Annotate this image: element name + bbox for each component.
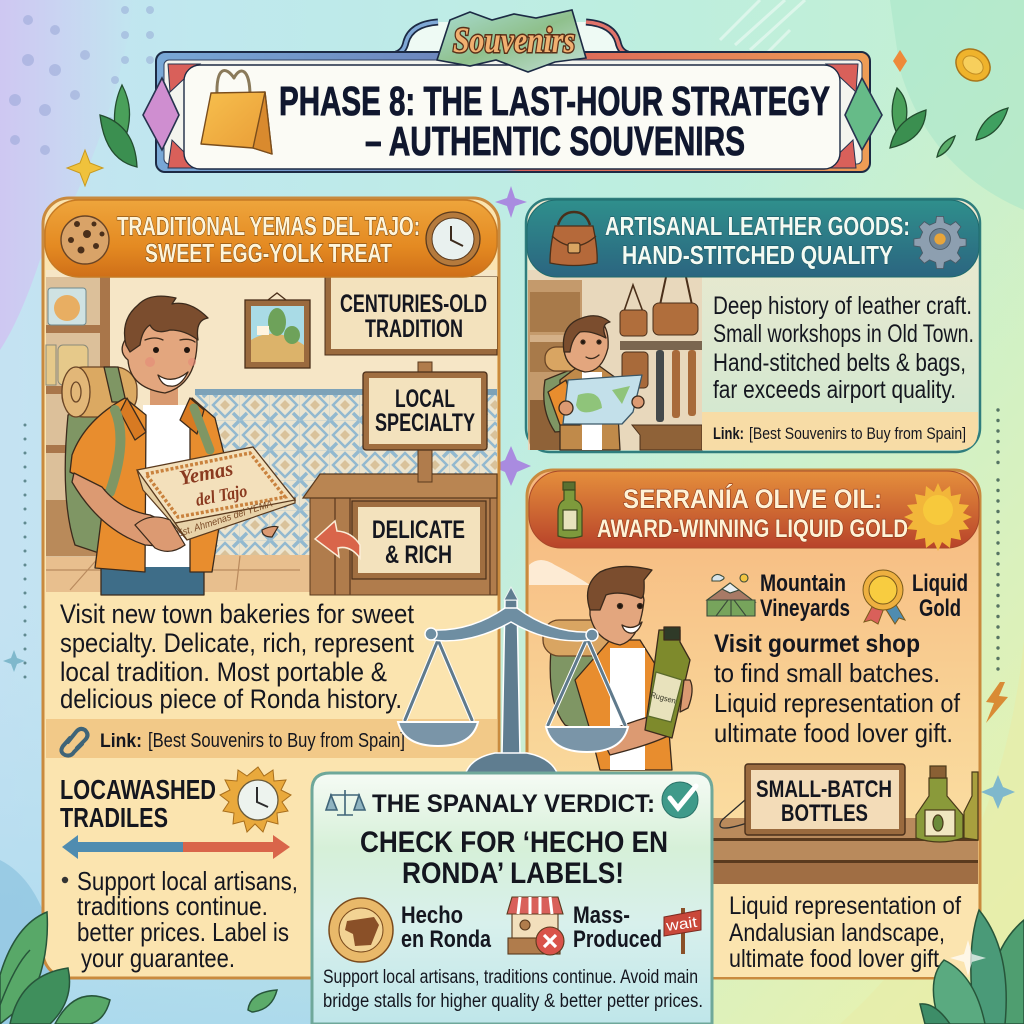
icon: clock	[426, 212, 480, 266]
picture frame	[245, 293, 310, 368]
banner	[143, 10, 882, 172]
text block: verdict advice	[323, 967, 703, 1012]
icon: hecho en ronda seal	[329, 898, 393, 962]
icon: wait sign: wait	[664, 914, 699, 935]
text block: bakery description: delicious piece of Ronda history.	[60, 684, 402, 714]
label: mass-produced: Mass-	[573, 902, 630, 929]
text block: gourmet shop	[714, 630, 961, 748]
sign: local specialty	[363, 362, 487, 482]
verdict headline: CHECK FOR ‘HECHO EN	[360, 826, 668, 859]
icon: gold coin	[950, 42, 996, 88]
icon: check mark	[662, 782, 698, 818]
sign: delicate and rich: DELICATE	[372, 516, 465, 544]
heading: locawashed tradiles: LOCAWASHED	[60, 774, 216, 805]
heading: locawashed tradiles	[60, 774, 216, 833]
panel: olive oil	[527, 470, 980, 978]
link bar: yemas: [Best Souvenirs to Buy from Spain]	[148, 730, 405, 752]
text block: andalusian landscape: Andalusian landscape,	[729, 919, 945, 947]
text block: gourmet shop: to find small batches.	[714, 658, 940, 688]
arrow: two-way comparison	[62, 835, 290, 859]
yemas del tajo box: Est. Ahmenas del YEMA	[176, 498, 274, 540]
text block: leather description: far exceeds airport quality.	[713, 376, 956, 404]
souvenirs map badge	[437, 10, 586, 72]
sign: centuries-old tradition	[325, 277, 497, 355]
label: mass-produced	[573, 902, 662, 953]
text block: andalusian landscape: ultimate food lover gift.	[729, 945, 945, 973]
link bar: yemas	[46, 719, 497, 758]
shelves	[46, 277, 110, 557]
label: mountain vineyards	[760, 570, 850, 622]
label: mountain vineyards: Vineyards	[760, 595, 850, 622]
title: PHASE 8: THE LAST-HOUR STRATEGY	[279, 78, 830, 124]
bullet list: local artisans: your guarantee.	[81, 943, 235, 973]
small-batch sign: SMALL-BATCH	[756, 776, 892, 803]
text block: leather description: Hand-stitched belts & bags,	[713, 349, 966, 377]
label: mass-produced: Produced	[573, 926, 662, 953]
illustration: bakery scene	[46, 270, 497, 595]
character: traveller with olive oil: Rugsen	[649, 690, 677, 706]
sign: centuries-old tradition: CENTURIES-OLD	[340, 290, 487, 318]
icon: market stall	[507, 897, 564, 955]
yemas del tajo box: del Tajo	[194, 480, 249, 510]
label: mountain vineyards: Mountain	[760, 570, 846, 597]
icon: white sparkle	[950, 940, 986, 976]
icon: mountain vineyards	[707, 574, 755, 616]
small-batch sign: BOTTLES	[781, 800, 868, 827]
icon: gear	[914, 216, 966, 269]
sign: delicate and rich	[352, 501, 486, 579]
text block: verdict advice: Support local artisans, traditions continue. Avoid main	[323, 967, 698, 988]
text block: bakery description: specialty. Delicate, rich, represent	[60, 628, 414, 658]
text block: andalusian landscape: Liquid representation of	[729, 892, 961, 920]
header: leather goods	[527, 200, 979, 277]
icon: sparkles and small decorations	[3, 50, 1015, 809]
title	[279, 78, 830, 164]
icon: shopping bag	[201, 71, 272, 154]
label: hecho en ronda: en Ronda	[401, 926, 492, 953]
small-batch sign	[720, 764, 905, 835]
illustration: leather workshop	[528, 270, 702, 450]
icon: balance scale	[398, 587, 628, 775]
header: olive oil: SERRANÍA OLIVE OIL:	[623, 483, 882, 514]
icon: olive oil bottle	[558, 482, 582, 538]
icon: medal	[863, 570, 905, 624]
text block: leather description	[713, 292, 974, 404]
bullet list: local artisans: better prices. Label is	[77, 917, 289, 947]
icon: small bottles	[916, 766, 978, 842]
panel: spanaly verdict	[312, 773, 712, 1024]
header: yemas: SWEET EGG-YOLK TREAT	[145, 238, 392, 268]
text block: gourmet shop: ultimate food lover gift.	[714, 718, 953, 748]
icon: leaves left of banner	[100, 85, 137, 167]
shelf with bottles	[529, 764, 978, 977]
label: liquid gold: Liquid	[912, 570, 968, 597]
icon: sun	[904, 483, 972, 551]
link bar: yemas: Link:	[100, 731, 142, 752]
icon: leather bag	[550, 212, 597, 266]
label: hecho en ronda	[401, 902, 492, 953]
text block: bakery description: local tradition. Most portable &	[60, 657, 387, 687]
text block: gourmet shop: Liquid representation of	[714, 688, 961, 718]
label: liquid gold: Gold	[919, 595, 961, 622]
text block: gourmet shop: Visit gourmet shop	[714, 630, 920, 658]
link bar: leather: [Best Souvenirs to Buy from Spain]	[749, 424, 966, 443]
header: leather goods: ARTISANAL LEATHER GOODS:	[605, 211, 910, 241]
sign: local specialty: SPECIALTY	[375, 409, 475, 437]
link bar: leather	[702, 412, 978, 450]
header: yemas: TRADITIONAL YEMAS DEL TAJO:	[117, 211, 420, 241]
sign: delicate and rich: & RICH	[385, 541, 452, 569]
header: olive oil	[529, 471, 979, 551]
header: yemas	[45, 200, 497, 277]
verdict headline: RONDA’ LABELS!	[402, 857, 624, 890]
text block: bakery description: Visit new town bakeries for sweet	[60, 599, 414, 629]
character: traveller with box	[62, 296, 228, 595]
header: olive oil: AWARD-WINNING LIQUID GOLD	[597, 515, 908, 543]
icon: verdict scales	[326, 790, 365, 815]
counter	[303, 474, 497, 595]
verdict headline	[360, 826, 668, 890]
icon: sun clock	[220, 767, 291, 832]
label: hecho en ronda: Hecho	[401, 902, 463, 929]
character: traveller with map	[544, 316, 644, 450]
plant: bottom right	[920, 910, 1024, 1024]
icon: cookie	[61, 216, 109, 264]
title: – AUTHENTIC SOUVENIRS	[365, 118, 745, 164]
heading: locawashed tradiles: TRADILES	[60, 802, 168, 833]
panel: leather goods	[526, 199, 980, 452]
icon: chain link	[61, 729, 88, 756]
text block: bakery description	[60, 599, 414, 714]
text block: verdict advice: bridge stalls for higher quality & better petter prices.	[323, 991, 703, 1012]
bullet list: local artisans: traditions continue.	[77, 891, 268, 921]
link bar: leather: Link:	[713, 424, 744, 443]
header: leather goods: HAND-STITCHED QUALITY	[622, 240, 893, 270]
icon: leaves right of banner	[890, 88, 1008, 157]
yemas del tajo box: Yemas	[177, 456, 235, 490]
souvenirs map badge: Souvenirs	[453, 20, 575, 60]
text block: leather description: Deep history of leather craft.	[713, 292, 972, 320]
sign: local specialty: LOCAL	[395, 385, 455, 413]
character: traveller with olive oil	[543, 566, 692, 770]
banner frame	[143, 22, 882, 172]
label: liquid gold	[912, 570, 968, 622]
plant: bottom left	[0, 912, 277, 1024]
sign: centuries-old tradition: TRADITION	[365, 315, 463, 343]
yemas del tajo box	[135, 447, 295, 551]
icon: wait sign	[664, 908, 701, 954]
bullet list: local artisans: Support local artisans,	[77, 866, 298, 896]
panel: yemas del tajo	[43, 198, 499, 978]
verdict title: THE SPANALY VERDICT:	[372, 790, 655, 818]
bullet list: local artisans	[62, 866, 298, 973]
text block: andalusian landscape	[729, 892, 961, 973]
arrow: to delicate and rich	[315, 521, 360, 558]
